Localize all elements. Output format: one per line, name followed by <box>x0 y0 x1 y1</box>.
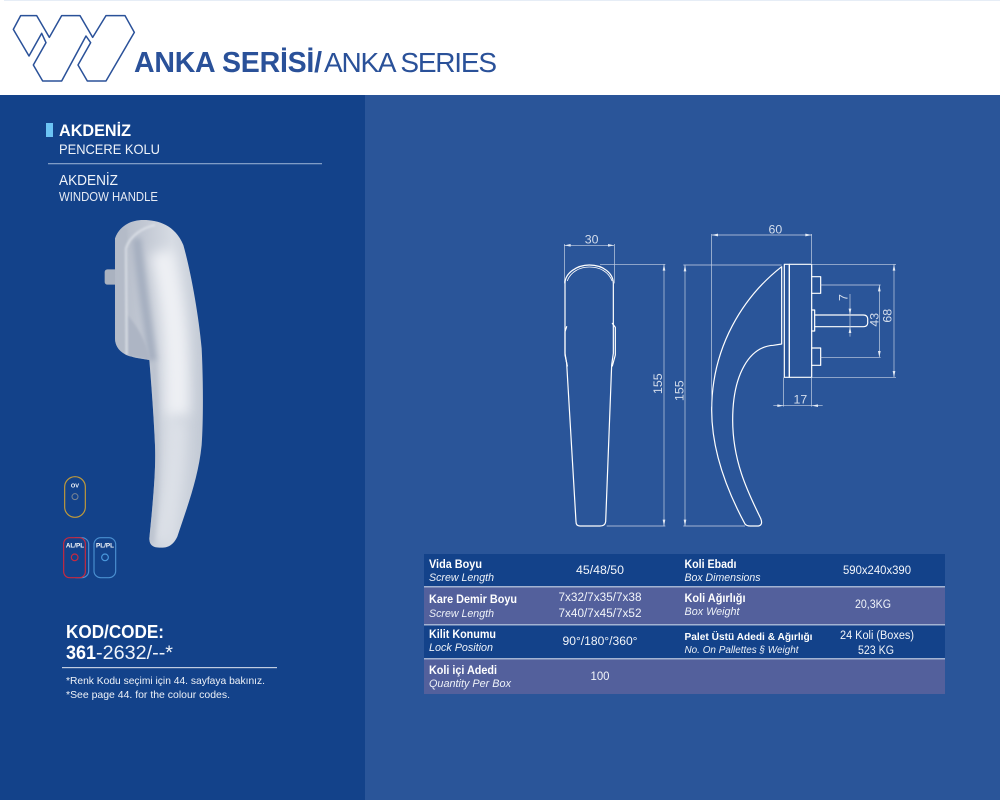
row: Vida Boyu: 45/48/50 <box>576 565 624 577</box>
row: Kilit Konumu: 90°/180°/360° <box>562 636 638 648</box>
side view outline <box>712 264 868 526</box>
row: Palet Üstü Adedi: Palet Üstü Adedi & Ağırlığı <box>684 630 813 643</box>
colour code notes: *See page 44. for the colour codes. <box>66 689 230 701</box>
row: Koli içi Adedi: 100 <box>590 671 610 683</box>
title: ANKA SERIES <box>324 47 497 78</box>
row: Kilit Konumu <box>429 629 638 654</box>
Turkish product type: PENCERE KOLU <box>59 141 160 157</box>
dimension: height 155 <box>600 264 665 526</box>
Turkish name: AKDENİZ <box>59 121 131 140</box>
dimension: screws 43: 43 <box>867 313 881 327</box>
row: Kare Demir Boyu: Kare Demir Boyu <box>429 594 517 606</box>
row: Koli içi Adedi: Quantity Per Box <box>429 678 511 690</box>
row: Koli Ağırlığı: Box Weight <box>684 606 740 618</box>
row: Palet Üstü Adedi <box>684 630 914 657</box>
row: Koli Ebadı: Box Dimensions <box>684 572 761 584</box>
row: Koli Ebadı: Koli Ebadı <box>684 559 736 571</box>
right panel background <box>365 95 1000 800</box>
row: Koli Ağırlığı <box>684 593 891 618</box>
row: Vida Boyu: Screw Length <box>429 572 494 584</box>
dimension: width 30 <box>564 233 614 283</box>
row: Palet Üstü Adedi: No. On Pallettes § Weight <box>684 645 800 656</box>
dimension: depth 60: 60 <box>768 223 782 237</box>
dimension: pin 7: 7 <box>837 294 851 301</box>
dimension: pin 7 <box>837 294 851 337</box>
product heading <box>46 121 322 204</box>
row: Kare Demir Boyu <box>429 592 642 620</box>
badge: OV: OV <box>71 484 79 490</box>
row: Kare Demir Boyu: Screw Length <box>429 608 494 620</box>
colour option badges <box>64 477 116 578</box>
title: ANKA SERİSİ/ <box>134 47 322 79</box>
colour code notes: *Renk Kodu seçimi için 44. sayfaya bakınız. <box>66 675 265 687</box>
row: Koli içi Adedi: Koli içi Adedi <box>429 665 497 677</box>
technical drawing: front view <box>564 233 665 526</box>
heading bullet <box>46 123 53 137</box>
table rows <box>424 554 945 694</box>
row: Koli Ağırlığı: Koli Ağırlığı <box>684 593 746 605</box>
English name: AKDENİZ <box>59 171 118 189</box>
row: Palet Üstü Adedi: 24 Koli (Boxes) <box>840 630 914 642</box>
dimension: plate depth 17: 17 <box>793 392 807 406</box>
row: Kare Demir Boyu: 7x40/7x45/7x52 <box>558 608 642 620</box>
code label: KOD/CODE: <box>66 622 164 642</box>
badge: PL/PL: PL/PL <box>96 542 114 549</box>
row: Koli Ebadı: 590x240x390 <box>843 565 911 577</box>
row: Palet Üstü Adedi: 523 KG <box>858 645 894 657</box>
row: Koli Ebadı <box>684 559 911 584</box>
badge: AL/PL: AL/PL <box>66 542 84 549</box>
dimension: width 30: 30 <box>585 233 599 247</box>
left panel background <box>0 95 365 800</box>
logo <box>13 16 134 81</box>
product photo: silver window handle <box>105 220 203 548</box>
specification table <box>424 554 945 694</box>
English product type: WINDOW HANDLE <box>59 190 158 204</box>
row: Kare Demir Boyu: 7x32/7x35/7x38 <box>558 592 642 604</box>
front view outline <box>565 265 615 526</box>
dimension: height 155: 155 <box>651 373 665 394</box>
row: Vida Boyu: Vida Boyu <box>429 559 482 571</box>
header band <box>0 0 1000 95</box>
dimension: plate 68: 68 <box>881 309 895 323</box>
dimension: depth 60 <box>712 223 812 407</box>
code value <box>66 643 174 664</box>
row: Kilit Konumu: Lock Position <box>429 642 493 654</box>
dimension: screws 43 <box>821 285 881 357</box>
dimension: height 155: 155 <box>672 380 686 401</box>
title <box>134 47 497 79</box>
technical drawing: side view <box>672 223 896 526</box>
code value: 361 <box>66 643 96 664</box>
dimension: height 155 <box>672 265 782 526</box>
row: Koli Ağırlığı: 20,3KG <box>855 599 891 611</box>
code value: -2632/--* <box>96 643 174 664</box>
colour code notes <box>66 675 265 701</box>
dimension: plate depth 17 <box>773 377 823 407</box>
row: Vida Boyu <box>429 559 624 584</box>
row: Kilit Konumu: Kilit Konumu <box>429 629 496 641</box>
row: Koli içi Adedi <box>429 665 610 690</box>
dimension: plate 68 <box>812 264 896 377</box>
product code <box>66 622 174 664</box>
